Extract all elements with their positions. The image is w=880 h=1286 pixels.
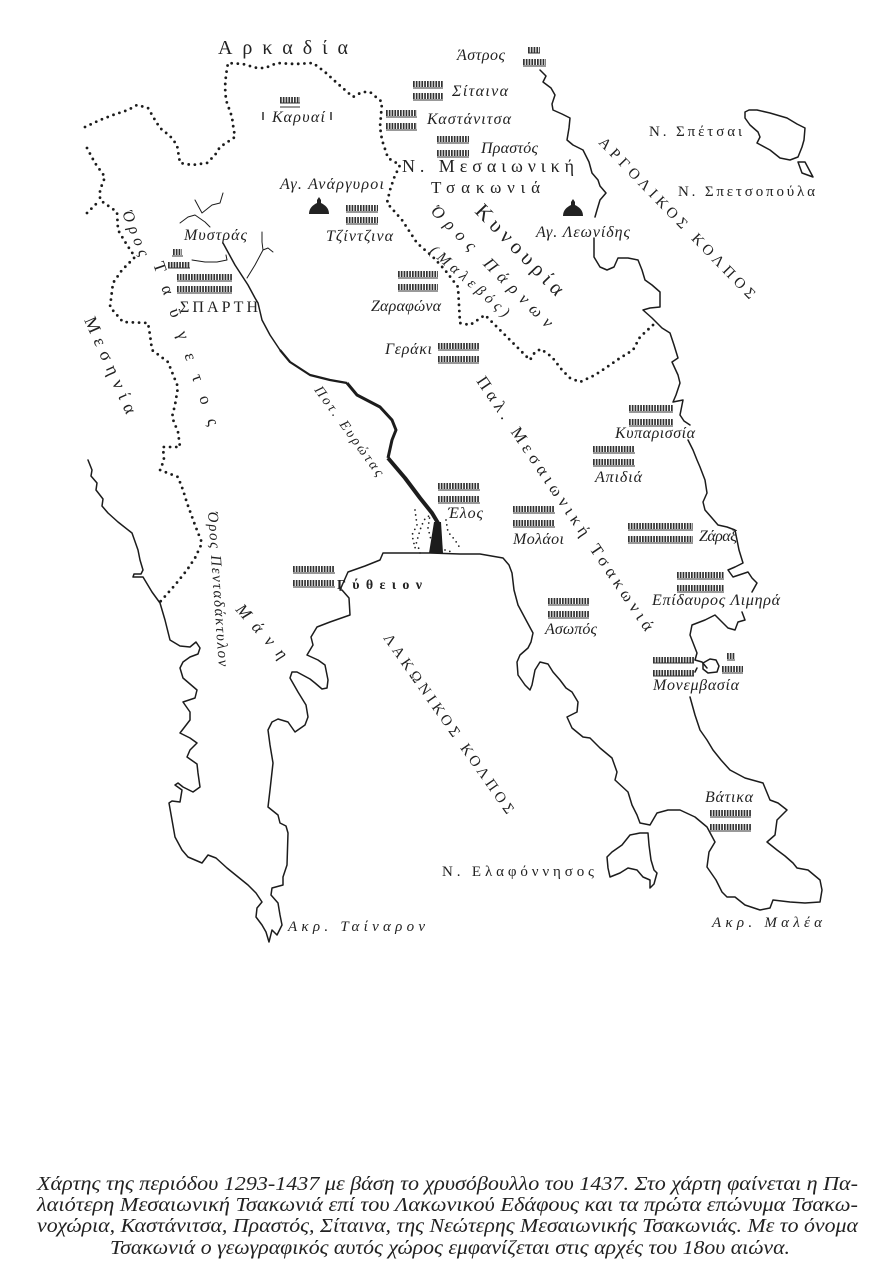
label: Apidia: Απιδιά	[594, 469, 643, 486]
label: Kastanitsa: Καστάνιτσα	[426, 111, 512, 128]
label: Epidavros Limera: Επίδαυρος Λιμηρά	[651, 592, 781, 609]
label: Tzintzina: Τζίντζινα	[326, 228, 394, 245]
settlement: Astros	[523, 50, 546, 66]
coastline: east middle	[688, 440, 757, 592]
map: medieval Tsakonia	[80, 37, 823, 942]
label: Asopos: Ασωπός	[544, 621, 598, 638]
settlement: Sitaina	[413, 84, 443, 100]
caption: νοχώρια, Καστάνιτσα, Πραστός, Σίταινα, της Νεώτερης Μεσαιωνικής Τσακωνιάς. Με το όνομα	[37, 1216, 859, 1237]
label: Karyai: Καρυαί	[271, 109, 326, 126]
settlement: Elos	[438, 486, 480, 503]
label: Astros: Άστρος	[456, 47, 506, 64]
label: Zarafona: Ζαραφώνα	[371, 298, 442, 315]
settlement: Mystras and Sparti	[168, 252, 232, 293]
label: Prastos: Πραστός	[480, 140, 538, 157]
label: Mystras: Μυστράς	[183, 227, 248, 244]
island: Spetsopoula	[798, 162, 813, 177]
settlement: Prastos	[437, 139, 469, 157]
island: Elafonisos	[607, 833, 657, 888]
caption: Χάρτης της περιόδου 1293-1437 με βάση το χρυσόβουλλο του 1437. Στο χάρτη φαίνεται η Πα-	[36, 1174, 858, 1195]
icon: church Ag. Anargyroi	[309, 197, 329, 214]
settlement: Zaras	[628, 526, 693, 543]
settlement: Epidavros Limera	[677, 575, 724, 592]
dotted border: branch	[87, 200, 100, 213]
label: Taygetos: Ταΰγετος	[149, 259, 223, 428]
label: Zarax: Ζάραξ	[699, 528, 737, 545]
settlement: Monemvasia	[653, 656, 743, 676]
coastline: Argolic gulf east upper	[540, 70, 690, 425]
settlement: Asopos	[548, 601, 589, 618]
label: Tsakonia: Τσακωνιά	[431, 178, 540, 197]
settlement: Molaoi	[513, 509, 555, 527]
caption: Τσακωνιά ο γεωγραφικός αυτός χώρος εμφανίζεται στις αρχές του 18ου αιώνα.	[110, 1238, 790, 1259]
island: Spetses	[745, 110, 805, 160]
river: Eurotas	[223, 243, 443, 553]
caption	[36, 1174, 859, 1259]
label: Geraki: Γεράκι	[384, 341, 432, 358]
coastline: Laconia west	[88, 460, 822, 942]
settlement: Kastanitsa	[386, 113, 417, 130]
island: Monemvasia	[703, 659, 719, 673]
coastline: east lower to Monemvasia	[690, 612, 745, 672]
label: Argolic gulf: ΑΡΓΟΛΙΚΟΣ ΚΟΛΠΟΣ	[595, 135, 758, 303]
label: Ag. Leonidis: Αγ. Λεωνίδης	[535, 224, 630, 241]
label: Cape Tainaron: Ακρ. Ταίναρον	[287, 919, 425, 935]
settlement: Tzintzina	[346, 208, 378, 224]
label: Sitaina: Σίταινα	[451, 83, 509, 100]
label: Ag. Anargyroi: Αγ. Ανάργυροι	[279, 176, 384, 193]
river tributaries	[180, 193, 273, 278]
label: N. Elafonisos: Ν. Ελαφόννησος	[442, 864, 594, 880]
label: Oros Parnon: Όρος Πάρνων	[427, 201, 558, 332]
label: Cape Malea: Ακρ. Μαλέα	[711, 915, 823, 931]
label: Messinia: Μεσηνία	[80, 313, 141, 417]
caption: λαιότερη Μεσαιωνική Τσακωνιά επί του Λακωνικού Εδάφους και τα πρώτα επώνυμα Τσακω-	[36, 1195, 858, 1216]
label: Eurotas river: Ποτ. Ευρώτας	[310, 383, 387, 480]
settlement: Gytheio	[293, 569, 335, 587]
label: Vatika: Βάτικα	[705, 789, 754, 806]
label: Oros: Όρος	[118, 208, 152, 259]
label: Malevos: (Μαλεβός)	[426, 243, 512, 321]
settlement: Zarafona	[398, 274, 438, 291]
label: Kyparissia: Κυπαρισσία	[614, 425, 696, 442]
settlement: Vatika	[710, 813, 751, 831]
label: N. Spetsopoula: Ν. Σπετσοπούλα	[678, 184, 815, 200]
dotted border: Messinia frontier	[87, 148, 202, 602]
settlement: Kyparissia	[629, 408, 673, 426]
label: Elos: Έλος	[447, 505, 484, 522]
label: Gytheio: Γύθειον	[337, 578, 423, 593]
icon: church Ag. Leonidis	[563, 199, 583, 216]
label: Oros Pentadaktylon: Όρος Πενταδάκτυλον	[204, 511, 231, 667]
label: N. Spetsai: Ν. Σπέτσαι	[649, 124, 742, 140]
label: Kynouria: Κυνουρία	[470, 199, 570, 300]
label: Laconian gulf: ΛΑΚΩΝΙΚΟΣ ΚΟΛΠΟΣ	[380, 631, 517, 817]
delta marsh dots	[412, 510, 460, 553]
label: Monemvasia: Μονεμβασία	[652, 677, 740, 694]
label: Molaoi: Μολάοι	[512, 531, 564, 548]
label: N. Mesaioniki: Ν. Μεσαιωνική	[402, 156, 574, 176]
settlement: Karyai	[263, 100, 331, 120]
settlement: Apidia	[593, 449, 635, 466]
label: Old medieval Tsakonia: Παλ. Μεσαιωνική Τσακωνιά	[473, 373, 658, 634]
label: Mani: Μάνη	[231, 599, 292, 663]
label: Arkadia: Αρκαδία	[218, 37, 349, 59]
settlement: Geraki	[438, 346, 479, 363]
label: Sparti: ΣΠΑΡΤΗ	[180, 299, 258, 316]
dotted border: Arkadia frontier	[85, 63, 653, 382]
